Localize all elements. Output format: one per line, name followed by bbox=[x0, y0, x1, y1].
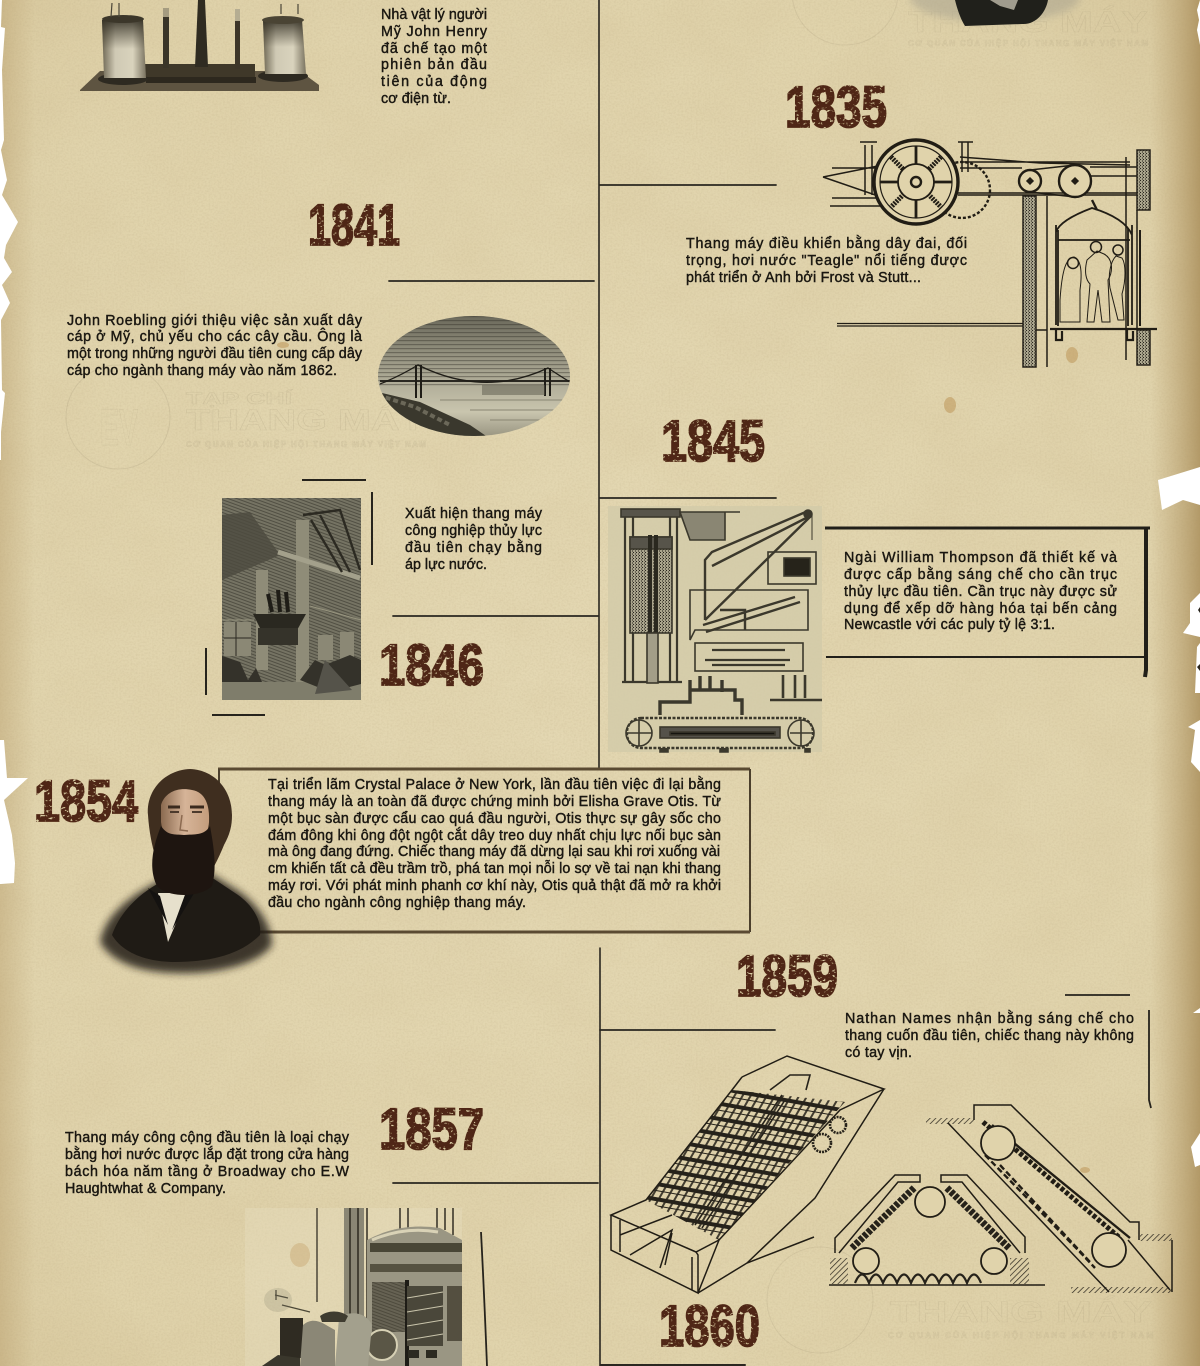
text block: 1857 description bbox=[65, 1130, 350, 1197]
text block: 1859 description: thang cuốn đầu tiên, chiếc thang này không bbox=[845, 1028, 1134, 1044]
watermark: magazine logo left: EV bbox=[100, 399, 138, 457]
text block: 1857 description: bách hóa năm tầng ở Broadway cho E.W bbox=[65, 1164, 350, 1180]
text block: 1845 description: thủy lực đầu tiên. Cần trục này được sử bbox=[844, 584, 1117, 600]
text block: 1845 description: Ngài William Thompson đã thiết kế và bbox=[844, 550, 1117, 566]
text block: 1831 John Henry: đã chế tạo một bbox=[381, 41, 487, 57]
icon: suspension bridge oval engraving bbox=[378, 316, 570, 440]
text block: 1846 description: Xuất hiện thang máy bbox=[405, 506, 543, 522]
year: 1835: 1835 bbox=[785, 75, 887, 140]
year: 1841: 1841 bbox=[308, 193, 400, 258]
text block: 1854 description: mà ông đang đứng. Chiếc thang máy đã dừng lại sau khi rơi xuống vài bbox=[268, 844, 720, 860]
text block: 1846 description: đầu tiên chạy bằng bbox=[405, 539, 542, 556]
text block: 1841 description: cáp cho ngành thang máy vào năm 1862. bbox=[67, 363, 337, 379]
text block: 1854 description bbox=[268, 776, 721, 911]
text block: 1854 description: Tại triển lãm Crystal Palace ở New York, lần đầu tiên việc đi lại bằng bbox=[268, 776, 721, 793]
text block: 1846 description: áp lực nước. bbox=[405, 557, 487, 573]
panel: 1859 Nathan Ames escalator bbox=[736, 944, 1151, 1108]
text block: 1854 description: một bục sàn được cẩu cao quá đầu người, Otis thực sự gây sốc cho bbox=[268, 811, 721, 827]
panel: 1845 William Thompson crane bbox=[608, 409, 1150, 752]
watermark: magazine logo left: TẠP CHÍ bbox=[186, 389, 294, 408]
text block: 1831 John Henry: tiên của động bbox=[381, 74, 487, 90]
year: 1845: 1845 bbox=[661, 409, 765, 474]
icon: crowd with hydraulic elevator engraving bbox=[222, 498, 361, 700]
text block: 1835 description: phát triển ở Anh bởi Frost và Stutt... bbox=[686, 270, 921, 286]
text block: 1859 description: Nathan Names nhận bằng sáng chế cho bbox=[845, 1010, 1134, 1027]
text block: 1845 description bbox=[844, 550, 1117, 633]
text block: 1831 John Henry: cơ điện từ. bbox=[381, 91, 451, 107]
text block: 1854 description: cm khiến tất cả đều trầm trồ, phá tan mọi nỗi lo sợ về tai nạn khi thang bbox=[268, 860, 721, 877]
portrait fragment at the top edge bbox=[910, 0, 1080, 26]
text block: 1846 description: công nghiệp thủy lực bbox=[405, 523, 542, 539]
icon: electromagnet apparatus photograph bbox=[80, 0, 319, 91]
year: 1854: 1854 bbox=[34, 769, 138, 834]
text block: 1845 description: được cấp bằng sáng chế cho cần trục bbox=[844, 566, 1117, 583]
year: 1859: 1859 bbox=[736, 944, 838, 1009]
watermark: magazine logo lower right: THANG MÁY bbox=[890, 1295, 1152, 1329]
watermark: magazine logo upper right bbox=[792, 0, 1148, 48]
panel: 1846 hydraulic elevator bbox=[206, 480, 543, 715]
decorative bracket around engraving bbox=[206, 480, 372, 715]
panel: 1860 escalator patent drawings bbox=[611, 1056, 1172, 1359]
text block: 1857 description: Haughtwhat & Company. bbox=[65, 1181, 226, 1197]
decorative rule bbox=[481, 1232, 487, 1366]
panel: 1835 Teagle elevator bbox=[686, 75, 1157, 367]
icon: portrait of Elisha Otis bbox=[100, 769, 272, 973]
decorative frame bbox=[1065, 995, 1151, 1108]
icon: steam passenger elevator engraving bbox=[245, 1208, 462, 1366]
icon: straight escalator cross section bbox=[926, 1105, 1172, 1293]
text block: 1831 John Henry: Nhà vật lý người bbox=[381, 7, 487, 23]
text block: 1841 description bbox=[67, 313, 363, 379]
text frame: Thompson description bbox=[825, 528, 1150, 677]
year: 1860: 1860 bbox=[659, 1294, 760, 1359]
text block: 1831 John Henry bbox=[381, 7, 488, 107]
text block: 1859 description: có tay vịn. bbox=[845, 1045, 912, 1061]
text block: 1835 description: trọng, hơi nước "Teagle" nổi tiếng được bbox=[686, 253, 967, 269]
year: 1846: 1846 bbox=[379, 633, 484, 698]
panel: 1857 first public elevator bbox=[65, 1097, 487, 1366]
watermark: magazine logo left: CƠ QUAN CỦA HIỆP HỘI THANG MÁY VIỆT NAM bbox=[186, 440, 426, 449]
panel: 1854 Elisha Otis safety demonstration bbox=[34, 769, 750, 973]
text block: 1835 description: Thang máy điều khiển bằng dây đai, đối bbox=[686, 235, 967, 252]
text block: 1846 description bbox=[405, 506, 543, 573]
panel: 1841 John Roebling bbox=[67, 193, 570, 440]
text block: 1854 description: đầu cho ngành công nghiệp thang máy. bbox=[268, 895, 526, 911]
text frame bbox=[180, 769, 750, 932]
watermark: magazine logo upper right: CƠ QUAN CỦA HIỆP HỘI THANG MÁY VIỆT NAM bbox=[908, 39, 1148, 48]
text block: 1831 John Henry: phiên bản đầu bbox=[381, 57, 487, 73]
timeline spine and connector rules bbox=[389, 0, 776, 1366]
watermark: magazine logo upper right: THANG MÁY bbox=[908, 5, 1148, 39]
icon: triangular escalator cross section bbox=[829, 1175, 1045, 1285]
icon: perspective escalator patent drawing bbox=[611, 1056, 884, 1293]
text block: 1831 John Henry: Mỹ John Henry bbox=[381, 24, 488, 40]
panel: John Henry electromagnetic motor bbox=[80, 0, 488, 107]
text block: 1841 description: cáp ở Mỹ, chủ yếu cho các cây cầu. Ông là bbox=[67, 328, 362, 345]
text block: 1841 description: John Roebling giới thiệu việc sản xuất dây bbox=[67, 313, 363, 329]
text block: 1859 description bbox=[845, 1010, 1134, 1061]
watermark: magazine logo left: THANG MÁY bbox=[186, 403, 426, 437]
text block: 1835 description bbox=[686, 235, 967, 286]
text block: 1854 description: máy rơi. Với phát minh phanh cơ khí này, Otis quả thật đã mở ra khởi bbox=[268, 878, 721, 894]
icon: Teagle belt-driven elevator engraving bbox=[823, 140, 1157, 367]
text block: 1845 description: Newcastle với các puly tỷ lệ 3:1. bbox=[844, 617, 1055, 633]
text block: 1857 description: Thang máy công cộng đầu tiên là loại chạy bbox=[65, 1130, 350, 1146]
text block: 1845 description: dụng để xếp dỡ hàng hóa tại bến cảng bbox=[844, 601, 1117, 617]
icon: hydraulic crane technical plate bbox=[608, 506, 822, 752]
year: 1857: 1857 bbox=[379, 1097, 484, 1162]
text block: 1854 description: đám đông khi ông đột ngột cắt dây treo duy nhất chịu lực nối bục sàn bbox=[268, 827, 721, 844]
watermark: magazine logo lower right bbox=[767, 1247, 1153, 1353]
text block: 1854 description: thang máy là an toàn đã được chứng minh bởi Elisha Grave Otis. Từ bbox=[268, 794, 721, 810]
watermark: magazine logo lower right: CƠ QUAN CỦA HIỆP HỘI THANG MÁY VIỆT NAM bbox=[888, 1331, 1153, 1340]
text block: 1841 description: một trong những người đầu tiên cung cấp dây bbox=[67, 346, 363, 362]
text block: 1857 description: bằng hơi nước được lắp đặt trong cửa hàng bbox=[65, 1146, 349, 1163]
watermark: magazine logo left bbox=[66, 365, 426, 469]
